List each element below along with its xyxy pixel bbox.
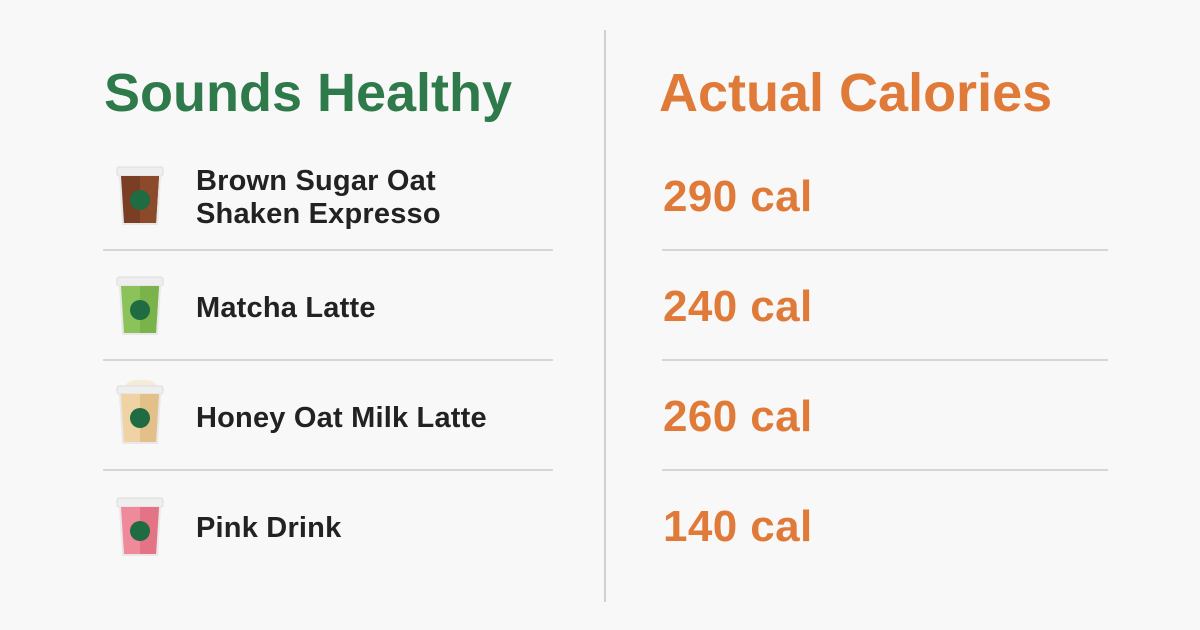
text: brown sugar: [196, 165, 441, 230]
calories 240: 240 cal: [663, 282, 813, 331]
icon: brown cup: [116, 166, 164, 225]
text: honey: Honey Oat Milk Latte: [196, 402, 487, 434]
text: brown sugar: Brown Sugar Oat: [196, 165, 436, 197]
title: sounds healthy: Sounds Healthy: [104, 63, 512, 123]
icon: matcha cup: [116, 276, 164, 335]
title: actual calories: Actual Calories: [659, 63, 1052, 123]
text: matcha: Matcha Latte: [196, 292, 376, 324]
calories 260: 260 cal: [663, 392, 813, 441]
icon: pink cup: [116, 498, 164, 556]
calories 140: 140 cal: [663, 502, 813, 551]
text: pink drink: Pink Drink: [196, 512, 341, 544]
icon: honey cup: [116, 380, 164, 444]
text: brown sugar: Shaken Expresso: [196, 198, 441, 230]
calories 290: 290 cal: [663, 172, 813, 221]
